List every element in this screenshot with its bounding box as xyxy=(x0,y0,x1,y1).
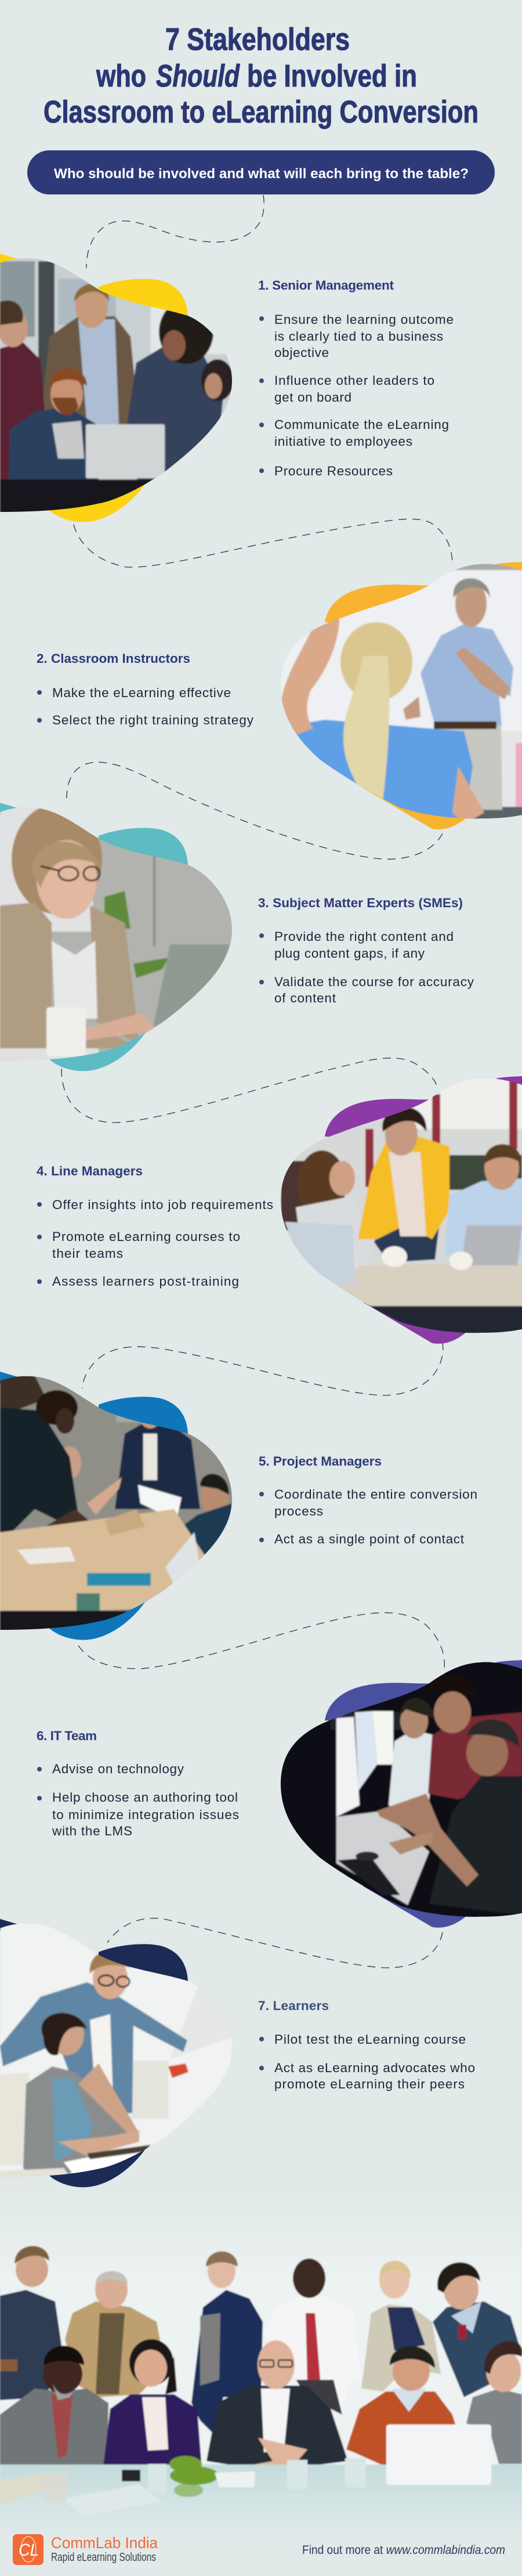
photo: senior management team around a laptop xyxy=(0,255,238,517)
bullet list: it team xyxy=(37,1762,239,1838)
person: man in navy sweater xyxy=(433,2263,519,2397)
dashed connector: section 4 to section 5 xyxy=(82,1342,443,1395)
accent shapes: indigo xyxy=(325,1660,522,1928)
dashed connector: section 1 to section 2 xyxy=(71,511,452,567)
bullet list: subject matter experts: Validate the course for accuracy xyxy=(274,975,474,989)
heading: project managers: 5. Project Managers xyxy=(259,1454,382,1469)
bullet list: senior management: Ensure the learning outcome xyxy=(274,312,454,327)
photo: woman working at a laptop xyxy=(0,804,238,1065)
accent shapes: teal xyxy=(0,803,188,1071)
question banner: Who should be involved and what will each bring to the table? xyxy=(54,166,469,182)
heading: learners: 7. Learners xyxy=(258,1998,329,2013)
dashed connector: section 3 to section 4 xyxy=(61,1058,438,1123)
photo: group of stakeholders at a table xyxy=(0,2194,522,2537)
bullet list: learners: Act as eLearning advocates who xyxy=(274,2061,475,2075)
dashed connector: section 2 to section 3 xyxy=(67,762,443,859)
bullet list: learners: Pilot test the eLearning course xyxy=(274,2032,466,2047)
accent shapes: orange xyxy=(325,562,522,829)
bullet list: subject matter experts: Provide the right content and xyxy=(274,929,454,944)
photo: instructor and student raising a hand xyxy=(278,560,522,824)
bullet list: subject matter experts: plug content gaps, if any xyxy=(274,946,425,961)
laptop xyxy=(386,2425,491,2485)
question banner xyxy=(27,150,495,194)
logo: commlab india: Rapid eLearning Solutions xyxy=(51,2551,156,2564)
section 3: subject matter experts xyxy=(0,803,238,1071)
table xyxy=(0,2465,522,2537)
bullet list: senior management: initiative to employees xyxy=(274,434,412,449)
bullet list: line managers: their teams xyxy=(52,1246,123,1261)
bullet list: senior management: is clearly tied to a business xyxy=(274,329,443,344)
bullet list: classroom instructors: Select the right training strategy xyxy=(52,713,254,727)
section 5: project managers xyxy=(0,1372,238,1640)
bullet list: learners xyxy=(259,2032,475,2091)
heading: subject matter experts: 3. Subject Matter Experts (SMEs) xyxy=(258,896,463,910)
person: blonde woman in beige blazer xyxy=(361,2261,441,2391)
dashed connector: section 5 to section 6 xyxy=(78,1612,444,1669)
photo: line manager with colleagues at a table xyxy=(278,1074,522,1338)
bullet list: senior management xyxy=(259,312,454,478)
section 1: senior management xyxy=(0,254,238,522)
bullet list: it team: with the LMS xyxy=(52,1824,132,1838)
bullet list: it team: Advise on technology xyxy=(52,1762,184,1776)
photo: project team around a table xyxy=(0,1373,238,1634)
accent shapes: yellow xyxy=(0,254,188,522)
section 7: learners xyxy=(0,1919,238,2187)
bullet list: senior management: Procure Resources xyxy=(274,464,393,478)
title xyxy=(44,22,478,129)
person: woman in navy blazer xyxy=(191,2252,263,2435)
bullet list: learners: promote eLearning their peers xyxy=(274,2077,465,2091)
person: older man in tan jacket xyxy=(65,2271,165,2397)
footer link text: Find out more at www.commlabindia.com xyxy=(302,2543,505,2557)
heading: line managers: 4. Line Managers xyxy=(37,1164,143,1178)
bullet list: line managers: Promote eLearning courses to xyxy=(52,1229,240,1244)
logo: commlab india xyxy=(13,2534,158,2565)
accent shapes: purple xyxy=(325,1076,522,1344)
bullet list: line managers: Assess learners post-training xyxy=(52,1274,239,1289)
title: who xyxy=(96,59,146,93)
table items: papers and glasses xyxy=(0,2458,365,2516)
bullet list: subject matter experts xyxy=(259,929,474,1005)
section 4: line managers xyxy=(278,1074,522,1344)
title: Should xyxy=(156,59,240,93)
accent shapes: dark navy xyxy=(0,1919,188,2187)
person: bald man in dark suit xyxy=(206,2340,348,2474)
title: 7 Stakeholders xyxy=(165,22,350,57)
heading: senior management: 1. Senior Management xyxy=(258,278,394,293)
bullet list: senior management: get on board xyxy=(274,390,351,405)
person: man in orange sweater xyxy=(346,2346,456,2467)
section 6: it team xyxy=(278,1660,522,1928)
bullet list: senior management: Communicate the eLearning xyxy=(274,417,449,432)
bullet list: it team: Help choose an authoring tool xyxy=(52,1790,238,1805)
bullet list: line managers: Offer insights into job requirements xyxy=(52,1197,273,1212)
logo: commlab india: CL xyxy=(19,2541,39,2560)
person: man in white shirt and striped tie xyxy=(263,2258,361,2415)
bullet list: line managers xyxy=(37,1197,273,1289)
title: be Involved in xyxy=(247,59,417,93)
bullet list: subject matter experts: of content xyxy=(274,991,336,1005)
bullet list: project managers: process xyxy=(274,1504,323,1518)
bullet list: project managers: Coordinate the entire conversion xyxy=(274,1487,477,1502)
dashed connector: section 6 to section 7 xyxy=(107,1918,443,1968)
bullet list: project managers: Act as a single point of contact xyxy=(274,1532,465,1546)
heading: it team: 6. IT Team xyxy=(37,1729,97,1743)
bullet list: senior management: Influence other leaders to xyxy=(274,373,434,388)
person: woman in grey blazer xyxy=(466,2341,522,2464)
person: man in grey jacket xyxy=(0,2346,108,2484)
bullet list: classroom instructors: Make the eLearning effective xyxy=(52,686,231,700)
plant xyxy=(169,2456,219,2497)
person: man in plaid shirt xyxy=(0,2246,61,2400)
logo: commlab india: CommLab India xyxy=(51,2534,158,2552)
bullet list: senior management: objective xyxy=(274,345,329,360)
heading: classroom instructors: 2. Classroom Instructors xyxy=(37,651,190,666)
bullet list: it team: to minimize integration issues xyxy=(52,1807,239,1822)
bullet list: classroom instructors xyxy=(37,686,254,727)
dashed connector: banner to section 1 xyxy=(86,195,264,268)
section 2: classroom instructors xyxy=(278,560,522,829)
photo: two learners at a computer xyxy=(0,1920,238,2182)
bullet list: project managers xyxy=(259,1487,477,1546)
person: woman in purple cardigan xyxy=(103,2339,201,2467)
photo: it team looking at monitors in a dark office xyxy=(278,1660,522,1921)
accent shapes: blue xyxy=(0,1372,188,1640)
